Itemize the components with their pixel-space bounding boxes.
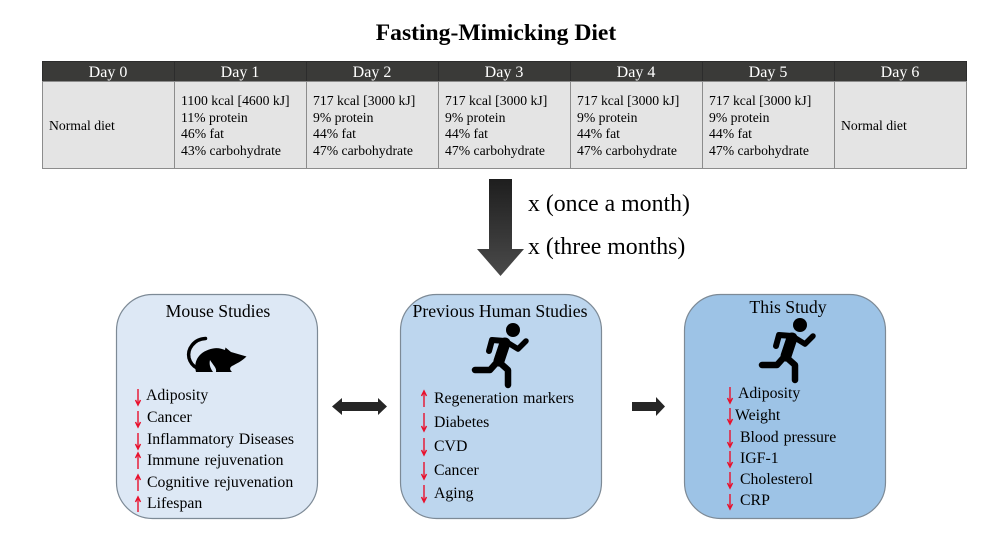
panel: mouse studies: [116, 294, 318, 518]
list: mouse study outcomes: Cognitive rejuvenation: [147, 474, 293, 491]
panel: mouse studies: Mouse Studies: [166, 301, 270, 321]
arrow: table down to human studies: [477, 179, 524, 276]
column: Day 6: Day 6: [881, 64, 919, 81]
arrow: human studies to this study: [632, 397, 665, 416]
column: Day 3: 44% fat: [445, 126, 488, 141]
column: Day 2: Day 2: [353, 64, 391, 81]
list: mouse study outcomes: Inflammatory Diseases: [147, 431, 294, 448]
column: Day 2: 44% fat: [313, 126, 356, 141]
panel: this study: [684, 294, 886, 518]
list: human study outcomes: CVD: [434, 438, 467, 455]
column: Day 2: [306, 62, 438, 168]
list: human study outcomes: Diabetes: [434, 414, 489, 431]
list: mouse study outcomes: [136, 387, 294, 512]
list: human study outcomes: Aging: [434, 485, 474, 502]
column: Day 0: Day 0: [89, 64, 127, 81]
column: Day 5: 47% carbohydrate: [709, 143, 809, 158]
list: this study outcomes: Blood pressure: [740, 429, 836, 446]
column: Day 6: [834, 62, 966, 168]
column: Day 4: Day 4: [617, 64, 655, 81]
icon: runner: [475, 323, 526, 385]
column: Day 6: Normal diet: [841, 118, 907, 133]
list: mouse study outcomes: Immune rejuvenation: [147, 452, 284, 469]
title: Fasting-Mimicking Diet: [376, 20, 616, 46]
column: Day 1: 11% protein: [181, 110, 248, 125]
column: Day 1: 1100 kcal [4600 kJ]: [181, 93, 290, 108]
column: Day 0: Normal diet: [49, 118, 115, 133]
column: Day 2: 9% protein: [313, 110, 374, 125]
column: Day 3: 717 kcal [3000 kJ]: [445, 93, 547, 108]
column: Day 3: [438, 62, 570, 168]
column: Day 4: 9% protein: [577, 110, 638, 125]
column: Day 1: Day 1: [221, 64, 259, 81]
column: Day 3: 47% carbohydrate: [445, 143, 545, 158]
column: Day 5: 9% protein: [709, 110, 770, 125]
column: Day 4: 47% carbohydrate: [577, 143, 677, 158]
column: Day 1: [174, 62, 306, 168]
list: human study outcomes: Cancer: [434, 462, 479, 479]
column: Day 1: 43% carbohydrate: [181, 143, 281, 158]
column: Day 1: 46% fat: [181, 126, 224, 141]
panel: previous human studies: [400, 294, 602, 518]
column: Day 5: 717 kcal [3000 kJ]: [709, 93, 811, 108]
column: Day 2: 717 kcal [3000 kJ]: [313, 93, 415, 108]
list: mouse study outcomes: Adiposity: [146, 387, 208, 404]
list: this study outcomes: [728, 385, 836, 509]
list: this study outcomes: Adiposity: [738, 385, 800, 402]
column: Day 5: [702, 62, 834, 168]
column: Day 2: 47% carbohydrate: [313, 143, 413, 158]
icon: runner: [762, 318, 813, 380]
column: Day 4: 44% fat: [577, 126, 620, 141]
column: Day 0: [42, 62, 174, 168]
list: this study outcomes: Cholesterol: [740, 471, 813, 488]
column: Day 5: 44% fat: [709, 126, 752, 141]
column: Day 5: Day 5: [749, 64, 787, 81]
list: mouse study outcomes: Lifespan: [147, 495, 202, 512]
list: human study outcomes: Regeneration markers: [434, 390, 574, 407]
list: human study outcomes: [422, 390, 574, 502]
icon: mouse: [189, 338, 246, 372]
text: three months: x (three months): [528, 234, 685, 260]
list: this study outcomes: IGF-1: [740, 450, 779, 467]
table: diet schedule: [42, 62, 966, 168]
list: this study outcomes: Weight: [735, 407, 781, 424]
column: Day 3: Day 3: [485, 64, 523, 81]
column: Day 3: 9% protein: [445, 110, 506, 125]
list: this study outcomes: CRP: [740, 492, 770, 509]
column: Day 4: [570, 62, 702, 168]
column: Day 4: 717 kcal [3000 kJ]: [577, 93, 679, 108]
arrow: double-headed between mouse and human studies: [332, 398, 387, 415]
text: once a month: x (once a month): [528, 191, 690, 217]
panel: previous human studies: Previous Human Studies: [413, 301, 588, 321]
list: mouse study outcomes: Cancer: [147, 409, 192, 426]
panel: this study: This Study: [749, 297, 827, 317]
